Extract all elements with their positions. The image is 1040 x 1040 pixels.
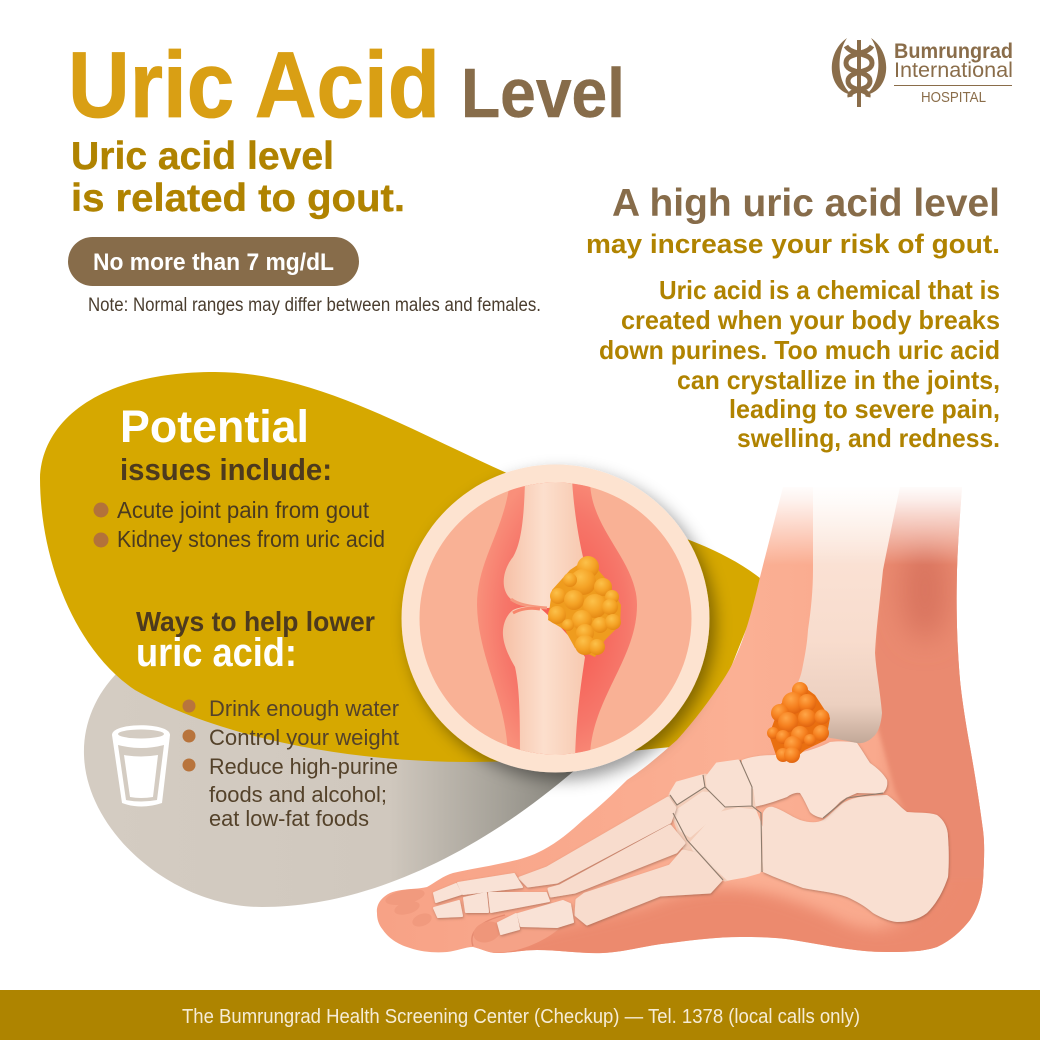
big toe and nails (476, 928, 559, 952)
bone: upper (504, 480, 583, 608)
footer bar: The Bumrungrad Health Screening Center (Checkup) — Tel. 1378 (local calls only) (182, 1006, 860, 1028)
inflamed tissue (477, 480, 637, 760)
crystals: ankle (767, 682, 830, 763)
bones: metatarsals (520, 798, 721, 924)
bone: calcaneus (762, 795, 949, 922)
list: potential issues: Acute joint pain from gout (117, 497, 370, 523)
badge: normal level pill (68, 237, 359, 286)
illustration: foot with bones (377, 480, 1000, 980)
title: Uric Acid (68, 32, 440, 137)
list: ways to lower: Drink enough water (209, 696, 399, 721)
text block: explanation (599, 275, 1000, 453)
list: ways to lower: foods and alcohol; (209, 782, 387, 807)
heading: potential issues: issues include: (120, 452, 332, 487)
bone: lower (503, 607, 585, 760)
note: Note: Normal ranges may differ between males and females. (88, 295, 541, 316)
text block: explanation: can crystallize in the joints, (677, 365, 1000, 395)
heading: high uric acid: A high uric acid level (612, 182, 1000, 225)
heading: potential issues: Potential (120, 401, 309, 452)
heading: ways to lower: uric acid: (136, 631, 297, 675)
heading: ways to lower: Ways to help lower (136, 606, 375, 637)
panel: ways to help (gray blob) (84, 672, 575, 907)
list: potential issues (94, 497, 385, 552)
logo: Bumrungrad International Hospital: International (894, 59, 1013, 82)
text block: explanation: down purines. Too much uric acid (599, 335, 1000, 365)
icon: water glass (112, 725, 170, 806)
subtitle (71, 135, 405, 220)
text block: explanation: leading to severe pain, (729, 394, 1000, 424)
text block: explanation: swelling, and redness. (737, 423, 1000, 453)
bones: midfoot (670, 761, 762, 880)
heading: ways to lower (136, 606, 375, 675)
footer bar (0, 990, 1040, 1040)
text block: explanation: Uric acid is a chemical that is (659, 275, 1000, 305)
icon: magnified joint circle (402, 464, 710, 772)
logo: Bumrungrad International Hospital: HOSPITAL (921, 89, 986, 106)
list: ways to lower (182, 696, 400, 831)
panel: potential issues (gold blob) (40, 372, 765, 762)
bone: tibia (788, 487, 900, 743)
crystals: joint (548, 556, 621, 657)
list: potential issues: Kidney stones from uric acid (117, 526, 385, 552)
logo: Bumrungrad International Hospital: Bumrungrad (894, 40, 1013, 63)
subtitle: is related to gout. (71, 177, 405, 220)
heading: high uric acid (586, 182, 1000, 259)
title: Level (461, 54, 625, 132)
heading: potential issues (120, 401, 332, 487)
text block: explanation: created when your body breaks (621, 305, 1000, 335)
subtitle: Uric acid level (71, 135, 334, 178)
logo: Bumrungrad International Hospital (832, 38, 1013, 107)
bones: toes (434, 874, 573, 934)
heading: high uric acid: may increase your risk of gout. (586, 229, 1000, 259)
badge: normal level pill: No more than 7 mg/dL (93, 249, 334, 276)
list: ways to lower: eat low-fat foods (209, 806, 369, 831)
bone: talus (741, 741, 887, 818)
list: ways to lower: Control your weight (209, 725, 400, 750)
list: ways to lower: Reduce high-purine (209, 754, 398, 779)
joint crease lines (670, 760, 883, 880)
